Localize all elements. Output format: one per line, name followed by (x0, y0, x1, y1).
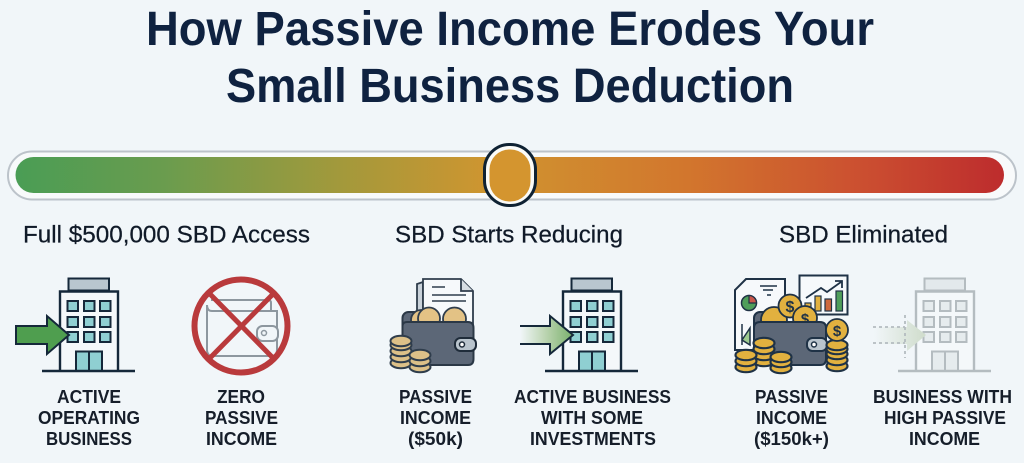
icon: dollar coin right: $ (801, 311, 810, 328)
icon: short coin stack (410, 350, 430, 372)
icon: dollar coin top: $ (786, 299, 795, 316)
icon: wallet with documents, chart and many coins (735, 276, 848, 373)
label: active business with some investments: ACTIVE BUSINESS (514, 386, 671, 407)
scale marker (484, 144, 536, 206)
label: zero passive income (205, 386, 278, 449)
label: active business with some investments: WITH SOME (541, 407, 643, 428)
label: active operating business: OPERATING (38, 407, 140, 428)
label: business with high passive income (873, 386, 1012, 449)
icon: tall coin stack (390, 336, 412, 368)
label: business with high passive income: INCOME (909, 428, 980, 449)
label: active operating business (38, 386, 140, 449)
icon: fading green arrow (520, 316, 573, 354)
label: zero passive income: PASSIVE (205, 407, 278, 428)
title: How Passive Income Erodes Your (146, 3, 874, 56)
icon: faded building with dotted arrow (873, 278, 991, 371)
icon: gold coin stacks (736, 338, 848, 373)
label: passive income 50k: INCOME (400, 407, 471, 428)
icon: dotted fading arrow (873, 315, 926, 358)
label: business with high passive income: BUSINESS WITH (873, 386, 1012, 407)
label: active business with some investments: INVESTMENTS (530, 428, 656, 449)
label: zero passive income: ZERO (217, 386, 265, 407)
label: passive income 150k: INCOME (756, 407, 827, 428)
label: zero passive income: INCOME (206, 428, 277, 449)
label: passive income 50k: ($50k) (408, 428, 463, 449)
label: passive income 150k: PASSIVE (755, 386, 828, 407)
label: active operating business: BUSINESS (46, 428, 132, 449)
icon: active building with fading arrow (520, 278, 638, 371)
label: active operating business: ACTIVE (57, 386, 121, 407)
label: passive income 50k (399, 386, 472, 449)
label: passive income 150k: ($150k+) (754, 428, 829, 449)
heading: full access: Full $500,000 SBD Access (23, 222, 310, 248)
title: Small Business Deduction (226, 60, 794, 113)
title (146, 3, 874, 113)
label: business with high passive income: HIGH PASSIVE (884, 407, 1006, 428)
label: passive income 150k (754, 386, 829, 449)
icon: wallet with document and coins (390, 279, 476, 372)
icon: crossed-out wallet (194, 280, 288, 372)
label: active business with some investments (514, 386, 671, 449)
heading: eliminated: SBD Eliminated (779, 222, 948, 248)
gradient scale bar with marker (8, 144, 1016, 206)
icon: active building with green arrow (16, 278, 135, 371)
icon: dollar coin on stack: $ (833, 323, 842, 340)
label: passive income 50k: PASSIVE (399, 386, 472, 407)
heading: starts reducing: SBD Starts Reducing (395, 222, 623, 248)
icon: green arrow (16, 316, 69, 354)
